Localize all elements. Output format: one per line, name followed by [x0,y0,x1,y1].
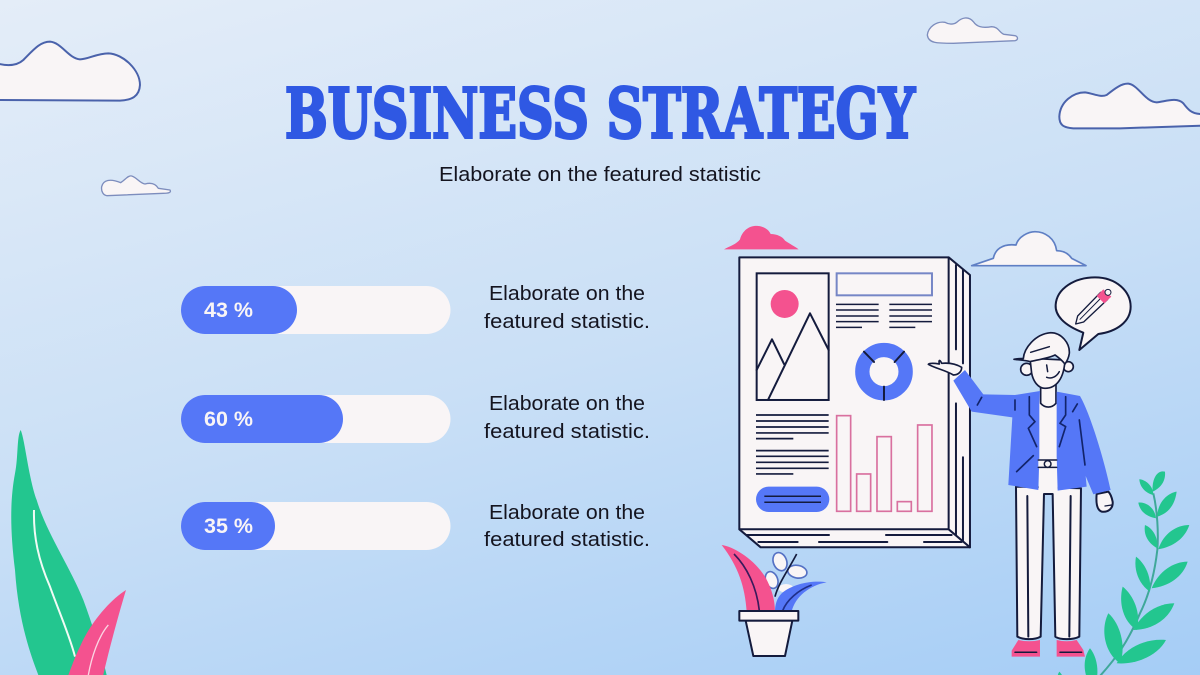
description 60: featured statistic. [484,421,650,443]
text lines left [756,415,829,474]
description 35 [484,502,650,551]
neck [1041,384,1056,407]
header box [837,273,932,295]
leaves [1058,471,1189,675]
description 35: Elaborate on the [489,502,645,524]
progress fill 60 [181,395,343,443]
pot [739,611,798,656]
progress fill 43 [181,286,297,334]
cloud: right large [1059,84,1200,128]
document illustration [739,257,970,547]
description 60 [484,393,650,443]
shoes [1012,640,1085,657]
description 43: Elaborate on the [489,283,645,305]
title: BUSINESS STRATEGY [285,74,916,154]
jacket [953,370,1111,494]
document pages [739,257,970,547]
plant: left leaves [11,430,126,675]
progress track 43 [181,286,450,334]
belt [1038,459,1057,468]
right hand [1096,492,1113,512]
text lines top [836,304,932,327]
hair [1014,333,1069,364]
value 35: 35 % [204,515,253,538]
description 35: featured statistic. [484,529,650,551]
subtitle: Elaborate on the featured statistic [439,164,761,186]
icon: pencil [1076,289,1111,324]
description 60: Elaborate on the [489,393,645,415]
progress fill 35 [181,502,275,550]
face [1030,358,1065,388]
plant: potted [722,545,827,656]
donut chart [862,350,906,400]
cloud: top left large [0,42,140,101]
stat row: 35 percent [181,502,650,551]
value 43: 43 % [204,299,253,322]
trousers [1016,487,1081,639]
progress track 60 [181,395,450,443]
stat row: 43 percent [181,283,650,334]
stem [1087,493,1158,675]
description 43 [484,283,650,333]
cloud: top right small [927,18,1017,43]
left hand [928,360,962,375]
description 43: featured statistic. [484,311,650,333]
cloud: pink above document [724,226,799,249]
picture frame with sun and mountains [757,273,829,400]
value 60: 60 % [204,408,253,431]
bar chart [837,416,932,511]
progress track 35 [181,502,450,550]
cloud: outlined beside document [972,232,1086,266]
speech bubble [1056,277,1131,350]
green leaf [11,430,107,675]
shirt [1039,392,1058,492]
pink leaf [68,590,126,675]
button [756,487,829,512]
stat row: 60 percent [181,393,650,443]
plant: right branch [1058,471,1189,675]
foliage [722,545,827,612]
ears [1021,362,1073,375]
cloud: small left [102,176,170,196]
person presenting [928,277,1131,657]
